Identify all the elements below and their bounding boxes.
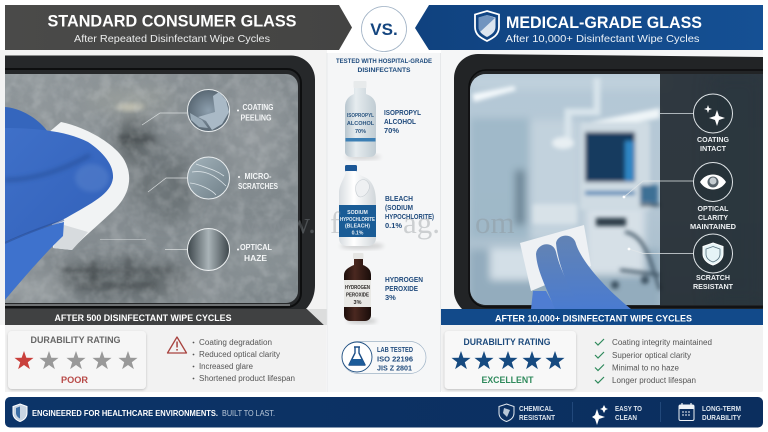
- list: benefits: Minimal to no haze: [612, 364, 680, 372]
- label: bleach: BLEACH: [385, 194, 413, 203]
- feature: long-term durability: [679, 403, 741, 422]
- callout: coating intact: [660, 94, 732, 153]
- bottle: bleach: [339, 165, 384, 249]
- lab tested badge: LAB TESTED: [377, 347, 413, 354]
- feature: easy to clean: EASY TO: [615, 406, 642, 413]
- label: bleach: [385, 194, 434, 230]
- label: isopropyl alcohol: 70%: [384, 126, 399, 135]
- bottle: bleach: SODIUM: [347, 210, 368, 216]
- list: benefits: Coating integrity maintained: [612, 338, 712, 347]
- callout: optical clarity maintained: [623, 162, 737, 231]
- label: bleach: (SODIUM: [385, 203, 413, 212]
- callout: optical clarity maintained: OPTICAL: [698, 204, 729, 213]
- icon: sparkles: [704, 105, 725, 126]
- label: bleach: HYPOCHLORITE): [385, 212, 434, 221]
- callout: optical clarity maintained: CLARITY: [698, 213, 728, 222]
- panel: disinfectants column: [327, 53, 441, 392]
- darkened overlay: [660, 74, 763, 305]
- list: benefits: Longer product lifespan: [612, 376, 696, 385]
- callout: coating peeling: COATING: [242, 103, 274, 112]
- gloved hand and wipe: [520, 225, 631, 309]
- label: bleach: 0.1%: [385, 221, 402, 230]
- label: hydrogen peroxide: [385, 275, 423, 302]
- caption band: 500 cycles: AFTER 500 DISINFECTANT WIPE CYCLES: [54, 313, 232, 323]
- callout: scratch resistant: SCRATCH: [696, 273, 730, 282]
- footer bar: ENGINEERED FOR HEALTHCARE ENVIRONMENTS.: [32, 409, 218, 418]
- device frame: [454, 54, 763, 309]
- caption band: 10,000+ cycles: [441, 309, 763, 325]
- durability rating card: DURABILITY RATING: [30, 335, 120, 346]
- caption band: 10,000+ cycles: AFTER 10,000+ DISINFECTANT WIPE CYCLES: [495, 314, 692, 324]
- icon: shield: [703, 243, 723, 265]
- label: isopropyl alcohol: ALCOHOL: [384, 117, 416, 126]
- bottle: bleach: 0.1%: [352, 230, 364, 236]
- watermark: [243, 205, 515, 240]
- durability rating card: DURABILITY RATING: [464, 337, 550, 348]
- bottle: isopropyl alcohol: ALCOHOL: [347, 121, 375, 127]
- icon: flask: [349, 347, 365, 365]
- main fingers: [5, 128, 113, 243]
- icon: shield: [475, 11, 499, 41]
- label: hydrogen peroxide: 3%: [385, 293, 396, 302]
- column heading: TESTED WITH HOSPITAL-GRADE: [336, 58, 432, 65]
- device frame: [5, 56, 315, 310]
- lab tested badge: JIS Z 2801: [377, 366, 412, 372]
- feature: chemical resistant: RESISTANT: [519, 415, 556, 422]
- watermark: om: [475, 205, 515, 240]
- bottle: isopropyl alcohol: 70%: [355, 129, 366, 135]
- callout: micro-scratches: SCRATCHES: [238, 182, 279, 191]
- panel: poor rating summary: [5, 325, 326, 392]
- lab tested badge: ISO 22196: [377, 356, 413, 364]
- list: benefits: Superior optical clarity: [612, 351, 691, 360]
- header: medical-grade glass: MEDICAL-GRADE GLASS: [506, 13, 702, 32]
- callout: scratch resistant: [628, 234, 733, 291]
- gloved hand and wipe: [5, 107, 129, 300]
- callout: optical clarity maintained: MAINTAINED: [690, 222, 737, 231]
- callout: optical haze: OPTICAL: [240, 243, 272, 252]
- upper finger: [5, 107, 47, 130]
- column heading: DISINFECTANTS: [358, 67, 411, 74]
- bottle: hydrogen peroxide: HYDROGEN: [345, 285, 370, 291]
- icon: warning triangle: [168, 337, 186, 353]
- bottle: bleach: HYPOCHLORITE: [340, 217, 375, 223]
- list: drawbacks: Reduced optical clarity: [199, 350, 280, 359]
- bottle: isopropyl alcohol: ISOPROPYL: [347, 113, 375, 119]
- VS badge: VS.: [370, 20, 398, 39]
- header: standard consumer glass: After Repeated Disinfectant Wipe Cycles: [74, 33, 270, 45]
- label: hydrogen peroxide: HYDROGEN: [385, 275, 423, 284]
- header: medical-grade glass: [415, 5, 763, 50]
- lower hand: [5, 222, 64, 300]
- callout: coating intact: COATING: [697, 135, 729, 144]
- panel: excellent rating summary: [441, 325, 763, 392]
- worn glass surface: [5, 74, 302, 304]
- wipe: [48, 122, 129, 250]
- list: drawbacks: [193, 338, 295, 383]
- bottle: isopropyl alcohol: [345, 81, 381, 160]
- durability rating card: [444, 331, 576, 389]
- bottle: hydrogen peroxide: 3%: [354, 300, 362, 306]
- list: benefits: [595, 338, 712, 385]
- icon: footer shield: [13, 404, 27, 422]
- callout: coating intact: INTACT: [700, 144, 726, 153]
- callout: optical haze: [100, 228, 272, 270]
- watermark: ag.: [403, 205, 440, 240]
- label: isopropyl alcohol: [384, 108, 421, 135]
- bottle: hydrogen peroxide: [344, 253, 377, 324]
- callout: scratch resistant: RESISTANT: [693, 282, 733, 291]
- footer bar: BUILT TO LAST.: [222, 409, 275, 418]
- callout: micro-scratches: [148, 157, 279, 199]
- footer bar: [5, 397, 763, 428]
- label: hydrogen peroxide: PEROXIDE: [385, 284, 418, 293]
- feature: chemical resistant: CHEMICAL: [519, 406, 554, 413]
- list: drawbacks: Coating degradation: [199, 338, 272, 347]
- header: standard consumer glass: STANDARD CONSUMER GLASS: [48, 12, 296, 30]
- durability rating card: EXCELLENT: [482, 375, 534, 386]
- finger crease: [5, 155, 90, 180]
- panel: standard glass photo: [0, 50, 327, 325]
- icon: eye: [700, 174, 726, 190]
- label: isopropyl alcohol: ISOPROPYL: [384, 108, 421, 117]
- list: drawbacks: Increased glare: [199, 362, 254, 371]
- bottle: bleach: (BLEACH): [345, 224, 370, 230]
- feature: easy to clean: CLEAN: [615, 415, 637, 422]
- callout: micro-scratches: MICRO-: [244, 172, 272, 181]
- feature: chemical resistant: [499, 404, 556, 422]
- callout: coating peeling: PEELING: [240, 114, 272, 122]
- VS badge: [362, 6, 406, 52]
- feature: long-term durability: DURABILITY: [702, 415, 741, 422]
- feature: easy to clean: [592, 405, 642, 425]
- watermark: www.: [243, 205, 316, 240]
- caption band: 500 cycles: [5, 309, 327, 325]
- callout: optical haze: HAZE: [244, 254, 268, 263]
- list: drawbacks: Shortened product lifespan: [199, 374, 295, 383]
- header: standard consumer glass: [5, 5, 352, 50]
- bottle: hydrogen peroxide: PEROXIDE: [346, 292, 369, 298]
- durability rating card: POOR: [61, 375, 88, 386]
- column heading: [336, 58, 432, 74]
- watermark: f: [330, 205, 341, 240]
- callout: coating peeling: [142, 90, 274, 132]
- feature: long-term durability: LONG-TERM: [702, 406, 741, 413]
- hospital scene: [470, 74, 763, 310]
- durability rating card: [8, 331, 146, 389]
- panel: medical glass photo: [441, 50, 763, 325]
- header: medical-grade glass: After 10,000+ Disinfectant Wipe Cycles: [506, 33, 700, 45]
- lab tested badge: [342, 342, 426, 374]
